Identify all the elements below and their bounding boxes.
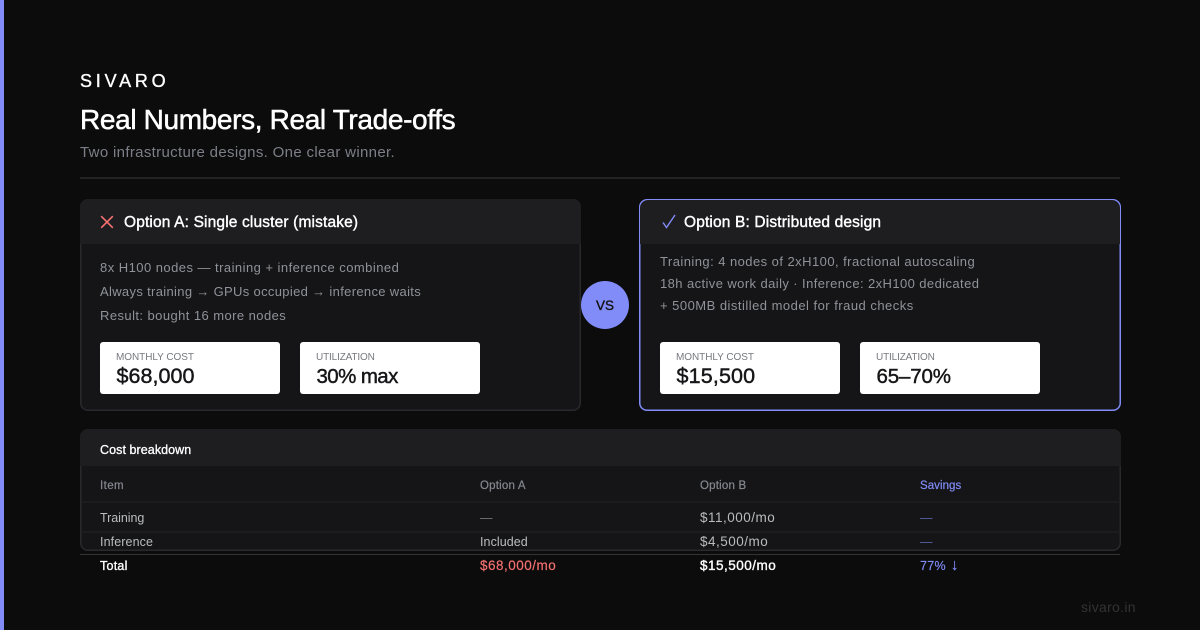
icon: cross: [100, 216, 114, 228]
option A heading: Option A: Single cluster (mistake): [124, 214, 358, 231]
option B description: 18h active work daily · Inference: 2xH100 dedicated: [660, 276, 979, 291]
accent bar: [0, 0, 4, 630]
table row: training: $11,000/mo: [700, 510, 775, 525]
stat: monthly cost B: $15,500: [676, 364, 755, 388]
table row: total: $68,000/mo: [480, 558, 556, 573]
stat: monthly cost A: $68,000: [116, 364, 195, 388]
footer url: sivaro.in: [1081, 599, 1136, 615]
icon: check: [662, 214, 676, 229]
table row: inference: $4,500/mo: [700, 534, 768, 549]
table header row: Item: [100, 480, 124, 492]
table header row: Option A: [480, 480, 526, 492]
table row: inference: Included: [480, 535, 528, 549]
option B description: [660, 254, 979, 313]
subtitle: Two infrastructure designs. One clear winner.: [80, 144, 395, 161]
option A description: 8x H100 nodes — training + inference combined: [100, 260, 399, 275]
option B description: + 500MB distilled model for fraud checks: [660, 298, 914, 313]
brand wordmark: SIVARO: [80, 71, 169, 91]
panel: option A: [80, 199, 581, 411]
stat: utilization B: UTILIZATION: [876, 352, 935, 363]
stat: utilization A: UTILIZATION: [316, 352, 375, 363]
stat: monthly cost B: MONTHLY COST: [676, 352, 754, 363]
option B header: [640, 200, 1120, 244]
table row: inference: [100, 534, 933, 549]
option A description: Always training → GPUs occupied → inference waits: [100, 284, 421, 299]
VS badge: VS: [596, 298, 614, 313]
VS badge: [581, 281, 629, 329]
table row: training: [100, 510, 933, 525]
panel: cost breakdown: [80, 429, 1121, 551]
panel: option B: [639, 199, 1121, 411]
title: Real Numbers, Real Trade-offs: [80, 104, 455, 135]
table row: total: $15,500/mo: [700, 558, 776, 573]
table header row: [100, 480, 961, 492]
option A description: Result: bought 16 more nodes: [100, 308, 286, 323]
option B description: Training: 4 nodes of 2xH100, fractional autoscaling: [660, 254, 975, 269]
table row: total: Total: [100, 559, 128, 573]
table header row: Savings: [920, 480, 961, 492]
cost breakdown header: [80, 429, 1121, 466]
stat: utilization B: [860, 342, 1040, 394]
table header row: Option B: [700, 480, 746, 492]
table row: training: —: [480, 511, 493, 525]
cost breakdown heading: Cost breakdown: [100, 443, 191, 457]
option B heading: Option B: Distributed design: [684, 214, 881, 231]
stat: utilization A: [300, 342, 480, 394]
table row: training: —: [920, 511, 933, 525]
stat: utilization B: 65–70%: [876, 365, 951, 388]
table row: total: [100, 557, 959, 574]
table row: training: Training: [100, 511, 144, 525]
option A header: [80, 199, 581, 244]
stat: monthly cost B: [660, 342, 840, 394]
stat: monthly cost A: MONTHLY COST: [116, 352, 194, 363]
table row: inference: Inference: [100, 535, 153, 549]
table row: total: 77% ↓: [920, 557, 959, 574]
stat: monthly cost A: [100, 342, 280, 394]
option A description: [100, 260, 421, 323]
stat: utilization A: 30% max: [316, 365, 398, 388]
table row: inference: —: [920, 535, 933, 549]
